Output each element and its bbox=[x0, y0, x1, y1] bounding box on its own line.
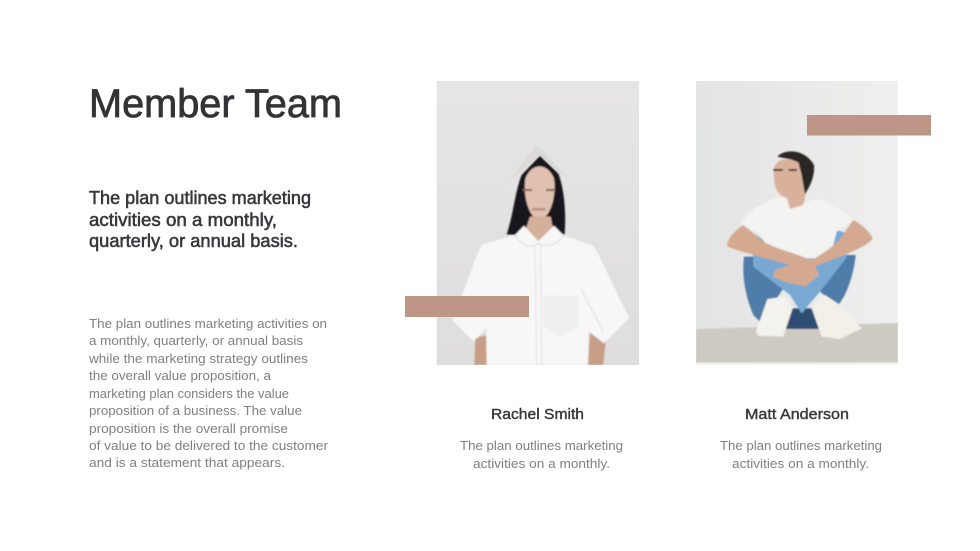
body paragraph: marketing plan considers the value bbox=[89, 386, 289, 401]
member: Matt Anderson bbox=[720, 406, 882, 471]
body paragraph: proposition of a business. The value bbox=[89, 403, 302, 418]
member: Rachel Smith: The plan outlines marketing bbox=[460, 438, 623, 453]
body paragraph: The plan outlines marketing activities on bbox=[89, 316, 327, 331]
member: Rachel Smith: activities on a monthly. bbox=[473, 456, 610, 471]
member: Rachel Smith bbox=[460, 406, 623, 471]
title: Member Team bbox=[89, 82, 342, 126]
subheading: activities on a monthly, bbox=[89, 210, 277, 230]
member: Matt Anderson: activities on a monthly. bbox=[732, 456, 869, 471]
body paragraph bbox=[88, 316, 329, 470]
photo: Matt Anderson bbox=[696, 81, 898, 365]
photo: Rachel Smith bbox=[437, 81, 639, 365]
subheading: quarterly, or annual basis. bbox=[89, 231, 298, 251]
body paragraph: proposition is the overall promise bbox=[89, 421, 288, 436]
member: Rachel Smith: Rachel Smith bbox=[491, 406, 584, 423]
body paragraph: while the marketing strategy outlines bbox=[88, 351, 308, 366]
subheading: The plan outlines marketing bbox=[89, 188, 311, 208]
body paragraph: a monthly, quarterly, or annual basis bbox=[89, 333, 303, 348]
member: Matt Anderson: Matt Anderson bbox=[745, 406, 849, 423]
subheading bbox=[89, 188, 311, 251]
accent bar left bbox=[405, 296, 529, 317]
accent bar right bbox=[807, 115, 931, 136]
body paragraph: of value to be delivered to the customer bbox=[89, 438, 329, 453]
body paragraph: and is a statement that appears. bbox=[89, 455, 285, 470]
member: Matt Anderson: The plan outlines marketing bbox=[720, 438, 882, 453]
body paragraph: the overall value proposition, a bbox=[89, 368, 272, 383]
